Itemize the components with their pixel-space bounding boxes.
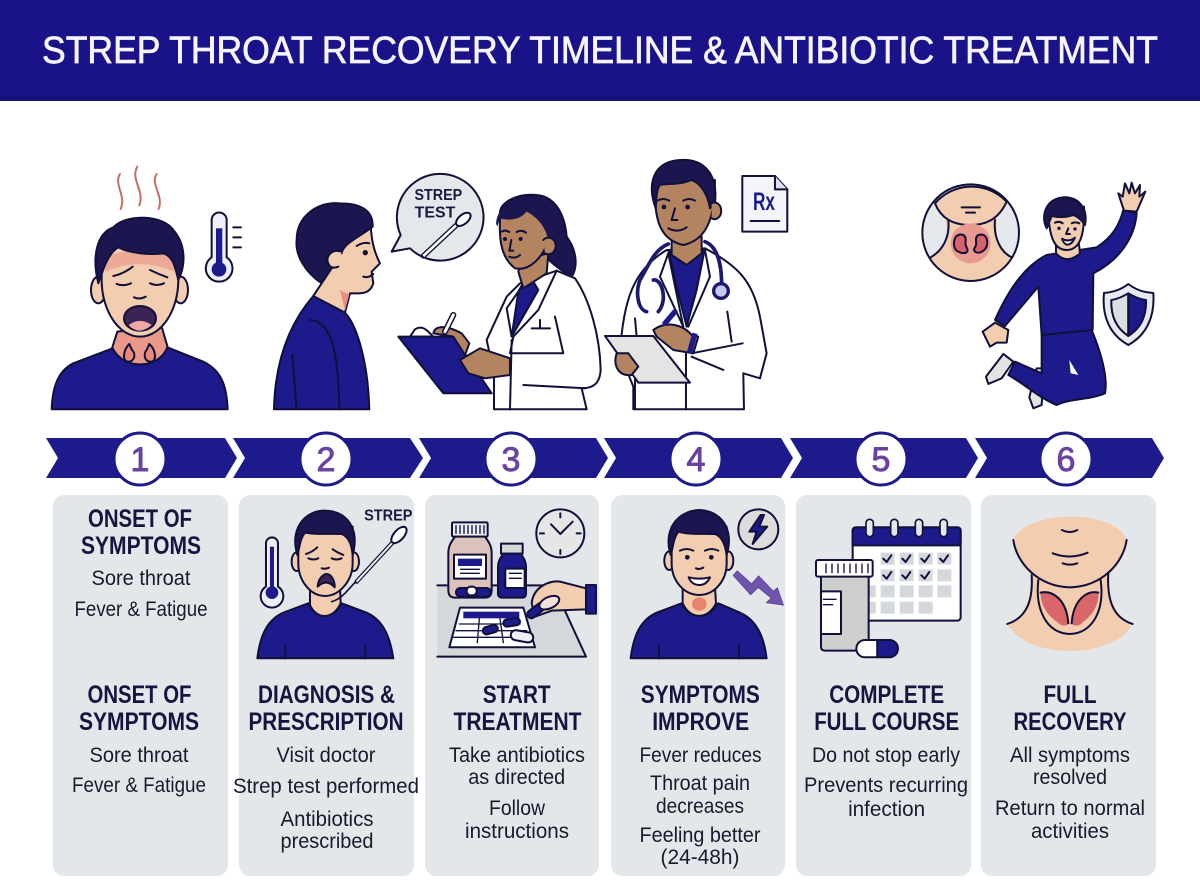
panel: step 4 symptoms improve (611, 495, 785, 876)
illustration: recovered person jumping (922, 183, 1154, 408)
sore neck (112, 327, 168, 365)
female doctor (398, 195, 601, 409)
icon: prescription document: Rx (753, 188, 775, 216)
shirt (274, 296, 369, 409)
heading and details: Do not stop early (812, 744, 960, 767)
heading and details: Return to normal (995, 797, 1145, 820)
heading and details (449, 681, 585, 843)
heading and details: RECOVERY (1014, 708, 1127, 736)
icon: calendar, pill bottle and capsule (816, 519, 961, 657)
heading and details: SYMPTOMS (641, 681, 760, 709)
step number 6: 6 (1057, 441, 1075, 479)
heading and details: resolved (1033, 766, 1107, 789)
illustration: doctors with strep test and prescription (392, 160, 787, 409)
face (102, 240, 178, 337)
timeline chevrons (46, 438, 1164, 478)
heading and details: infection (848, 798, 925, 821)
upper heading and symptoms: SYMPTOMS (81, 532, 201, 560)
step number 5: 5 (872, 441, 890, 479)
stethoscope (638, 242, 722, 312)
lower heading and symptoms: Sore throat (90, 744, 189, 767)
head (313, 223, 380, 313)
panel: step 3 start treatment (425, 495, 599, 876)
heading and details: TREATMENT (454, 708, 582, 736)
lower heading and symptoms: ONSET OF (88, 681, 192, 709)
icon: prescription document (742, 176, 787, 232)
step number 3: 3 (502, 441, 520, 479)
heading and details: decreases (656, 795, 744, 818)
heading and details: Follow (489, 797, 546, 820)
step number 3 (485, 433, 537, 485)
heading and details: FULL COURSE (814, 708, 959, 736)
ears (91, 277, 106, 303)
jumping person (983, 183, 1145, 408)
icon: pills, bottles, clock and schedule (437, 509, 596, 657)
heading and details: All symptoms (1010, 744, 1130, 767)
hair (95, 218, 184, 283)
heading and details (804, 681, 968, 821)
heading and details: Prevents recurring (804, 774, 968, 797)
speech bubble: strep test: TEST (415, 204, 456, 221)
heading and details (640, 681, 762, 869)
icon: thermometer (206, 212, 241, 282)
heading and details: Strep test performed (233, 775, 419, 798)
swollen glands (124, 344, 134, 362)
fever heat waves (118, 167, 160, 209)
step number 1: 1 (131, 441, 149, 479)
step number 4: 4 (687, 441, 705, 479)
heading and details: instructions (465, 820, 569, 843)
heading and details: PRESCRIPTION (248, 708, 404, 736)
heading and details: Fever reduces (640, 744, 762, 767)
speech bubble: strep test: STREP (414, 187, 462, 204)
heading and details: Feeling better (640, 824, 760, 847)
lower heading and symptoms (72, 681, 206, 797)
illustration: feverish patient with thermometer (52, 167, 241, 409)
step number 5 (855, 433, 907, 485)
heading and details: (24-48h) (660, 846, 740, 869)
heading and details: Visit doctor (276, 744, 376, 767)
heading and details: FULL (1044, 681, 1096, 709)
heading and details: activities (1031, 820, 1109, 843)
speech bubble: strep test (392, 174, 484, 261)
icon: sick patient with swab and thermometer (257, 508, 412, 658)
icon: sick patient with swab and thermometer: STREP (364, 508, 412, 525)
icon: shield (1104, 284, 1154, 345)
heading and details: IMPROVE (652, 708, 749, 736)
title: STREP THROAT RECOVERY TIMELINE & ANTIBIOTIC TREATMENT (42, 30, 1158, 72)
heading and details: as directed (468, 766, 565, 789)
shirt (52, 347, 228, 409)
heading and details: Antibiotics (280, 808, 374, 831)
male doctor (605, 160, 767, 409)
icon: smiling patient, energy and falling fever arrow (631, 509, 783, 658)
upper heading and symptoms (74, 505, 208, 621)
heading and details (233, 681, 419, 853)
upper heading and symptoms: Fever & Fatigue (74, 598, 208, 621)
panel: step 6 full recovery (981, 495, 1156, 876)
upper heading and symptoms: ONSET OF (88, 505, 192, 533)
panel: step 1 onset of symptoms (53, 495, 228, 876)
hair (296, 203, 373, 283)
panel: step 2 diagnosis and prescription (233, 495, 419, 876)
step number 6 (1040, 433, 1092, 485)
step number 4 (670, 433, 722, 485)
title banner (0, 0, 1200, 101)
upper heading and symptoms: Sore throat (92, 567, 191, 590)
step number 1 (114, 433, 166, 485)
step number 2 (300, 433, 352, 485)
panel: step 5 complete full course (796, 495, 971, 876)
heading and details: Take antibiotics (449, 744, 585, 767)
lower heading and symptoms: SYMPTOMS (79, 708, 199, 736)
icon: healthy throat (1007, 516, 1133, 651)
heading and details: Throat pain (650, 772, 750, 795)
heading and details: START (483, 681, 551, 709)
heading and details (995, 681, 1145, 843)
heading and details: COMPLETE (829, 681, 944, 709)
heading and details: DIAGNOSIS & (258, 681, 395, 709)
illustration: patient in profile (274, 203, 380, 409)
heading and details: prescribed (280, 830, 374, 853)
lower heading and symptoms: Fever & Fatigue (72, 774, 206, 797)
step number 2: 2 (317, 441, 335, 479)
expression (113, 267, 167, 299)
magnified healthy throat (922, 184, 1019, 281)
